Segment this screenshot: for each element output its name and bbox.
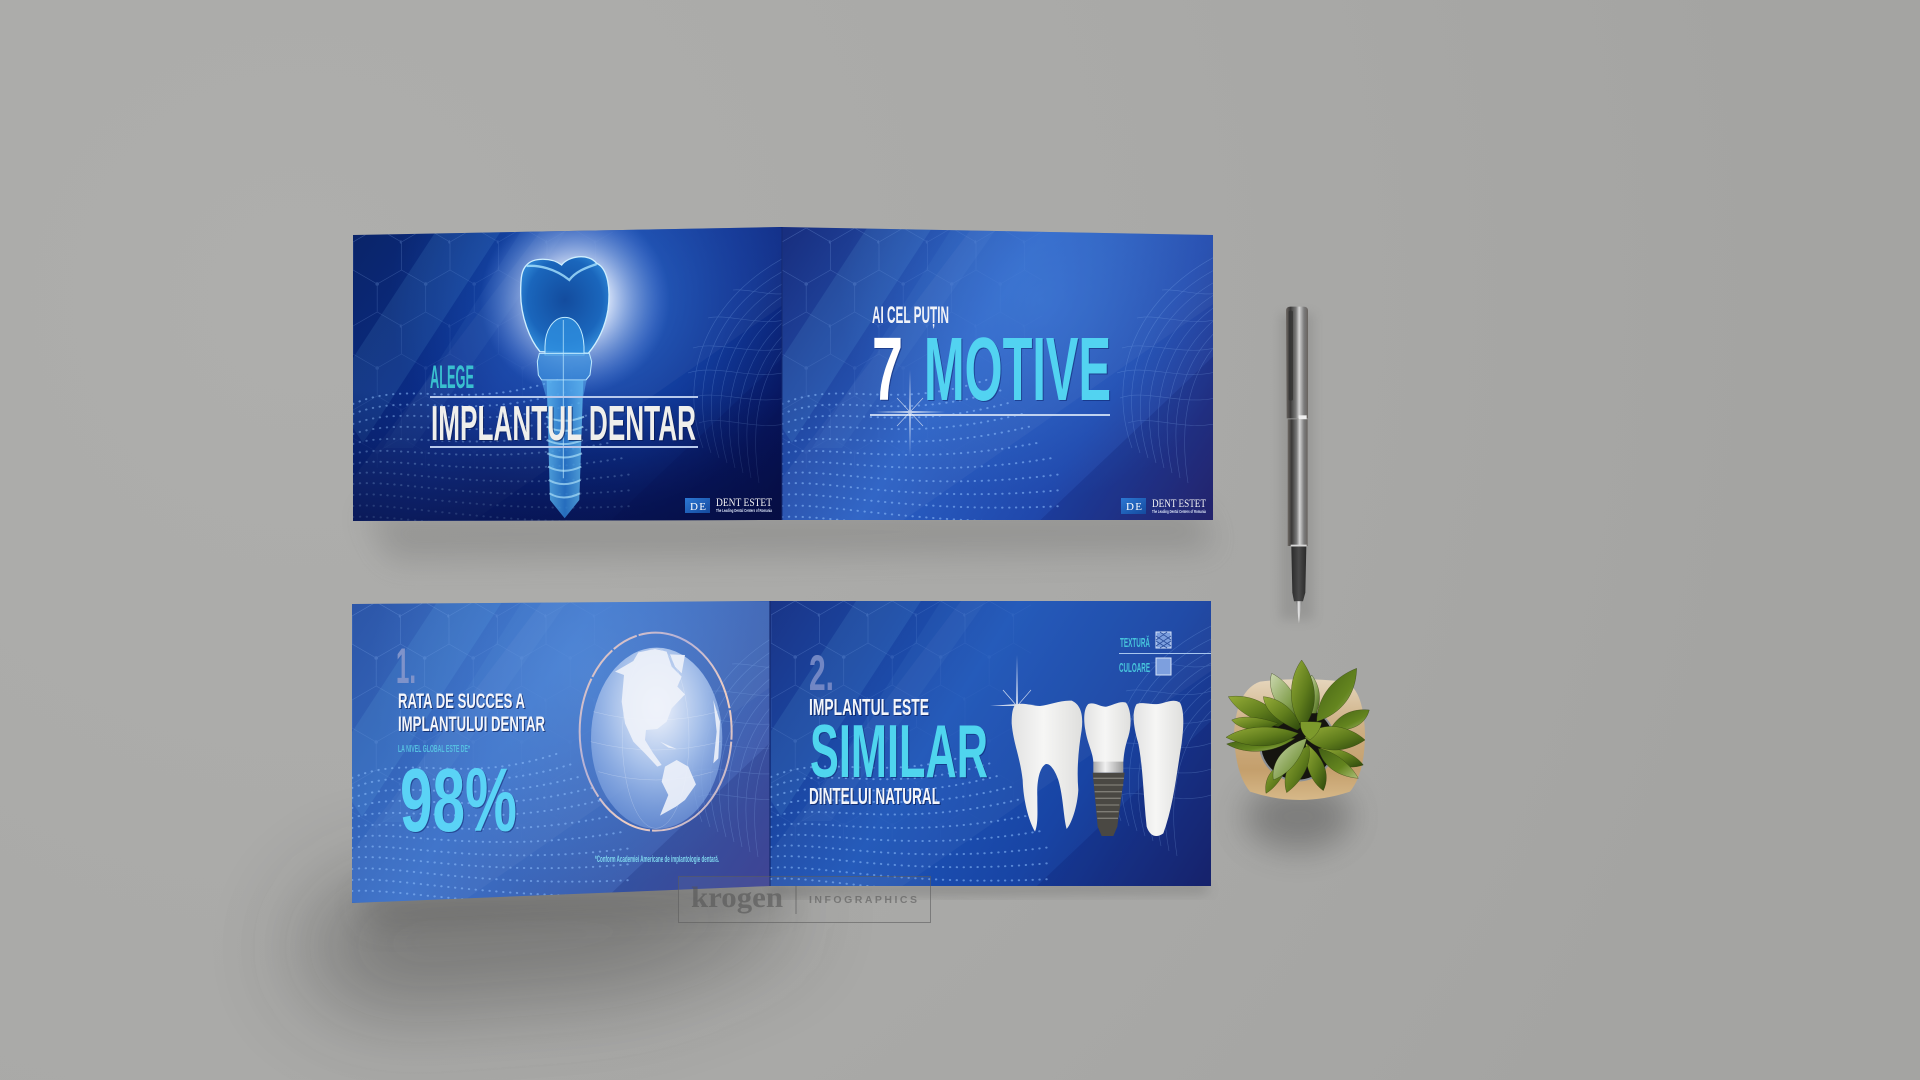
wooden pot — [1234, 679, 1365, 800]
text: success rate heading — [398, 694, 546, 732]
icon: fountain pen — [1280, 307, 1313, 623]
logo: Dent Estet right: The Leading Dental Centers of Romania — [1152, 509, 1206, 514]
legend: texture and colour — [1119, 632, 1211, 675]
watermark: Krogen Infographics — [678, 876, 930, 922]
icon: sparkle on tooth — [990, 656, 1034, 706]
panel: reason 1, success rate: LA NIVEL GLOBAL ESTE DE* — [398, 743, 470, 755]
brochure 1: cover spread — [353, 227, 1213, 521]
logo: Dent Estet left: The Leading Dental Centers of Romania — [716, 508, 772, 513]
panel: reason 1, success rate: *Conform Academiei Americane de implantologie dentară. — [595, 854, 719, 865]
text: success rate heading: RATA DE SUCCES A — [398, 690, 525, 713]
legend: texture and colour: CULOARE — [1119, 660, 1150, 675]
number: 7: 7 — [872, 320, 903, 420]
text: success rate heading: IMPLANTULUI DENTAR — [398, 713, 545, 736]
icon: sparkle — [875, 370, 945, 456]
icon: blue dental implant — [521, 257, 609, 518]
divider line — [870, 414, 1110, 416]
watermark: Krogen Infographics: INFOGRAPHICS — [809, 894, 917, 906]
logo: Dent Estet right: DENT ESTET — [1152, 496, 1207, 510]
logo: Dent Estet left — [685, 497, 772, 513]
text: DINTELUI NATURAL: DINTELUI NATURAL — [809, 783, 940, 809]
number: 2.: 2. — [809, 645, 834, 701]
divider line lower — [430, 446, 698, 448]
panel: cover left, implant: ALEGE — [430, 359, 474, 395]
brochure 2: inner spread — [352, 600, 1212, 906]
icon: potted plant — [1226, 660, 1369, 850]
divider line upper — [430, 396, 698, 398]
panel: cover right, 7 motive: AI CEL PUȚIN — [872, 302, 949, 329]
heading: MOTIVE: MOTIVE — [924, 320, 1111, 420]
panel: reason 1, success rate: 1. — [396, 638, 416, 694]
panel: reason 1, success rate — [352, 600, 792, 906]
heading: IMPLANTUL DENTAR: IMPLANTUL DENTAR — [431, 397, 696, 451]
text: IMPLANTUL ESTE: IMPLANTUL ESTE — [809, 694, 929, 720]
shadows cast by brochures — [290, 510, 1215, 1010]
leaves — [1226, 660, 1369, 793]
logo: Dent Estet right: D E — [1126, 501, 1142, 513]
logo: Dent Estet right — [1121, 498, 1206, 514]
logo: Dent Estet left: DENT ESTET — [716, 497, 772, 509]
logo: Dent Estet left: D E — [690, 501, 706, 513]
legend: texture and colour: TEXTURĂ — [1120, 635, 1150, 650]
icon: globe in ring — [580, 633, 732, 831]
heading: SIMILAR: SIMILAR — [810, 709, 988, 793]
panel: reason 2, similar to natural tooth — [770, 600, 1212, 905]
panel: cover right, 7 motive — [782, 225, 1222, 532]
watermark: Krogen Infographics: krogen — [691, 881, 783, 914]
icon: teeth and implant — [1012, 701, 1183, 836]
panel: cover left, implant — [353, 227, 782, 521]
stat: 98%: 98% — [400, 751, 517, 851]
map shapes: Americas — [615, 649, 720, 816]
